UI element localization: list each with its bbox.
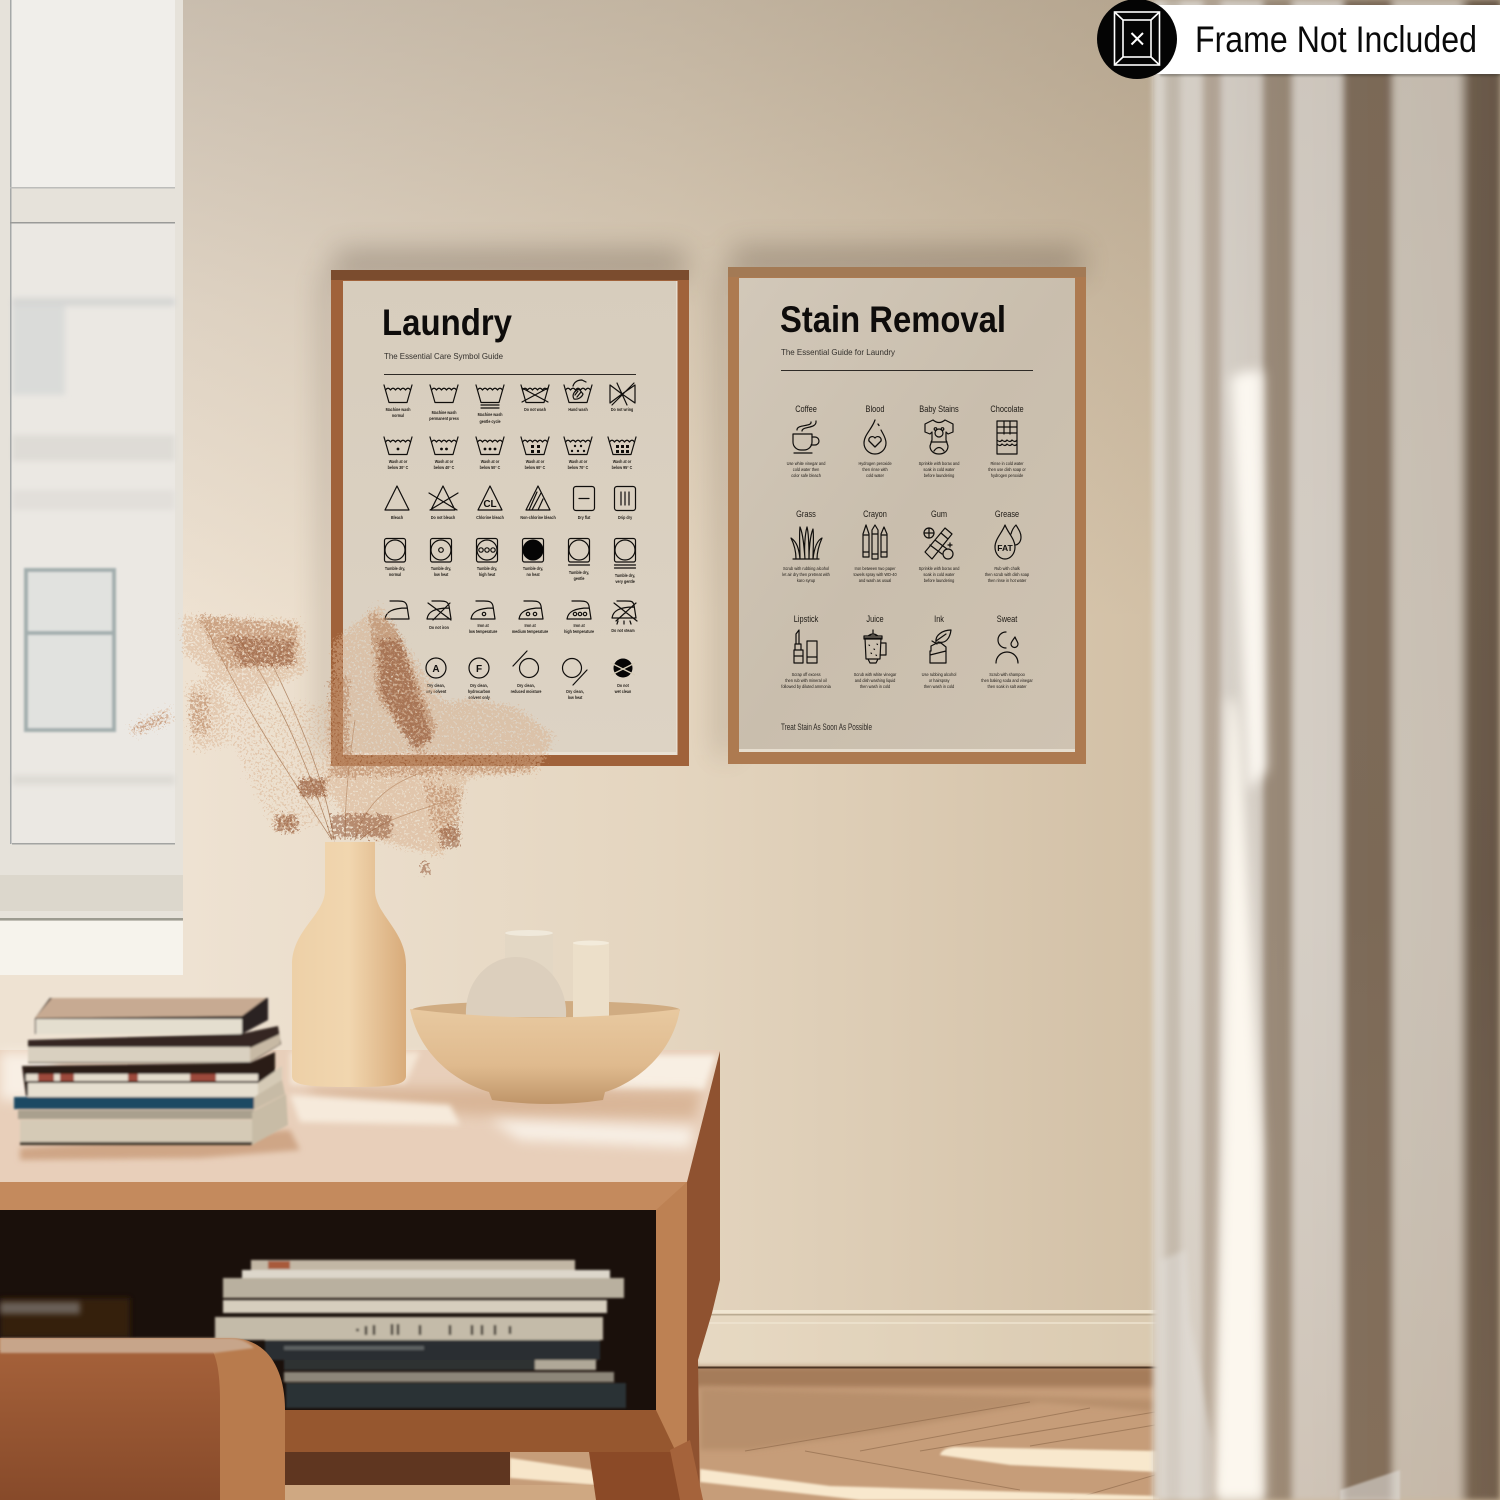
row: wash temperature symbols <box>384 437 636 470</box>
laundry title: Laundry <box>382 302 512 343</box>
icon: dry clean hydrocarbon: hydrocarbon <box>468 689 491 694</box>
icon: tumble dry low heat <box>430 538 452 577</box>
item: ink <box>922 614 956 689</box>
icon: fat drop: FAT <box>997 543 1014 553</box>
icon: dry clean low heat: Dry clean, <box>566 689 584 694</box>
icon: do not iron: Do not iron <box>429 625 449 630</box>
books on lower shelf <box>215 1260 626 1408</box>
item: blood <box>858 404 892 478</box>
item: blood: then rinse with <box>862 467 888 472</box>
item: chocolate <box>988 404 1026 478</box>
mid seed clusters <box>128 605 535 850</box>
icon: wash 40: Wash at or <box>435 459 454 464</box>
table side panel <box>687 1051 720 1500</box>
footer note: Treat Stain As Soon As Possible <box>781 722 872 732</box>
item: gum <box>919 509 960 583</box>
icon: iron high: high temperature <box>564 629 595 634</box>
icon: machine wash gentle cycle: gentle cycle <box>480 419 501 424</box>
item: sweat: then soak in salt water <box>988 684 1027 689</box>
icon: chocolate bar <box>997 421 1017 454</box>
item: ink: then wash in cold <box>924 684 955 689</box>
icon: dry clean low heat <box>562 658 587 700</box>
icon: iron medium: medium temperature <box>512 629 549 634</box>
item: chocolate: then use dish soap or <box>988 467 1026 472</box>
icon: dry clean reduced moisture: Dry clean, <box>517 683 535 688</box>
item: baby stains: soak in cold water <box>923 467 955 472</box>
item: crayon: towels spray with WD-40 <box>853 572 897 577</box>
row: tumble dry symbols <box>384 538 636 584</box>
icon: baby onesie <box>925 420 953 454</box>
icon: dry flat: Dry flat <box>578 515 591 520</box>
icon: lipstick <box>794 630 817 663</box>
icon: wash 95: Wash at or <box>613 459 632 464</box>
icon: juice mug <box>864 630 886 663</box>
table foot <box>589 1452 703 1500</box>
icon: wash 40: below 40° C <box>434 465 454 470</box>
bowl <box>410 1009 680 1104</box>
item: sweat: Sweat <box>997 614 1018 624</box>
icon: iron low <box>469 601 498 634</box>
icon: coffee cup <box>793 421 819 453</box>
badge bar <box>1150 5 1500 74</box>
icon: wash 70: below 70° C <box>568 465 588 470</box>
item: gum: Gum <box>931 509 947 519</box>
table leg frame <box>656 1182 687 1450</box>
icon: tumble dry normal: normal <box>389 572 401 577</box>
icon: tumble dry no heat: Tumble dry, <box>523 566 543 571</box>
item: sweat: then baking soda and vinegar <box>981 678 1033 683</box>
item: grease: then scrub with dish soap <box>985 572 1030 577</box>
icon: tumble dry low heat: Tumble dry, <box>431 566 451 571</box>
icon: iron medium: Iron at <box>524 623 536 628</box>
item: lipstick: followed by diluted ammonia <box>781 684 831 689</box>
item: crayon: Crayon <box>863 509 887 519</box>
icon: wash 95: below 95° C <box>612 465 632 470</box>
item: lipstick <box>781 614 831 689</box>
icon: machine wash permanent press: permanent press <box>429 416 459 421</box>
icon: chlorine bleach: CL <box>483 499 497 510</box>
light seed clusters <box>124 600 558 860</box>
item: grease <box>985 509 1030 583</box>
item: coffee: Coffee <box>795 404 817 414</box>
icon: machine wash normal: Machine wash <box>386 407 411 412</box>
icon: machine wash permanent press: Machine wash <box>432 410 457 415</box>
icon: person with sweat drop <box>996 632 1018 663</box>
icon: do not bleach: Do not bleach <box>431 515 456 520</box>
item: grass: let air dry then pretreat with <box>782 572 830 577</box>
opposite building window <box>26 570 114 730</box>
icon: do not wet clean: wet clean <box>614 689 632 694</box>
item: blood: Hydrogen peroxide <box>858 461 892 466</box>
icon: dry clean any solvent <box>426 658 447 694</box>
item: juice <box>854 614 897 689</box>
panel: Stain Removal poster <box>728 267 1086 764</box>
icon: dry clean any solvent: any solvent <box>426 689 447 694</box>
curtain <box>1153 0 1500 1500</box>
icon: dry clean hydrocarbon: Dry clean, <box>470 683 488 688</box>
icon: dry clean any solvent: A <box>432 664 440 675</box>
icon: tumble dry very gentle: Tumble dry, <box>615 573 635 578</box>
icon: wash 40 <box>430 437 458 470</box>
icon: tumble dry no heat <box>522 538 544 577</box>
item: chocolate: Chocolate <box>990 404 1024 414</box>
icon: wash 95 <box>608 437 636 470</box>
chair <box>0 1338 285 1500</box>
icon: dry clean hydrocarbon: F <box>476 664 482 675</box>
icon: gum <box>924 528 953 559</box>
icon: iron high: Iron at <box>573 623 585 628</box>
icon: tumble dry gentle: gentle <box>574 576 585 581</box>
item: grease: then rinse in hot water <box>988 578 1027 583</box>
stack of books on table <box>14 998 288 1145</box>
lower shelf board <box>285 1410 676 1452</box>
icon: tumble dry high heat: high heat <box>479 572 496 577</box>
stain frame <box>728 267 1086 764</box>
icon: drip dry: Drip dry <box>618 515 633 520</box>
item: coffee: color safe bleach <box>791 473 821 478</box>
item: crayon <box>853 509 897 583</box>
item: grass: Grass <box>796 509 816 519</box>
icon: iron low: Iron at <box>477 623 489 628</box>
panel: Laundry poster <box>331 270 689 766</box>
item: ink: Ink <box>934 614 945 624</box>
item: lipstick: Lipstick <box>794 614 819 624</box>
item: ink: Use rubbing alcohol <box>922 672 956 677</box>
item: coffee: cold water then <box>793 467 820 472</box>
icon: wash 60: Wash at or <box>526 459 545 464</box>
icon: do not wring <box>610 383 635 412</box>
item: baby stains: before laundering <box>924 473 955 478</box>
icon: wash 70: Wash at or <box>569 459 588 464</box>
icon: non-chlorine bleach <box>520 486 556 520</box>
row: bleach and dry symbols <box>385 486 636 520</box>
icon: do not wet clean <box>611 658 635 694</box>
icon: do not wash: Do not wash <box>524 407 546 412</box>
icon: tumble dry normal <box>384 538 406 577</box>
icon: machine wash normal: normal <box>392 413 404 418</box>
icon: iron medium <box>512 601 549 634</box>
stain title: Stain Removal <box>780 299 1006 340</box>
icon: do not wring: Do not wring <box>611 407 634 412</box>
dried flower plant <box>124 600 558 876</box>
item: gum: before laundering <box>924 578 955 583</box>
icon: wash 30: below 30° C <box>388 465 408 470</box>
item: juice: Scrub with white vinegar <box>854 672 897 677</box>
item: blood: Blood <box>866 404 884 414</box>
laundry frame <box>331 270 689 766</box>
icon: bleach: Bleach <box>391 515 403 520</box>
shelf interior <box>0 1205 660 1445</box>
icon: iron low: low temperature <box>469 629 498 634</box>
icon: non-chlorine bleach: Non-chlorine bleach <box>520 515 556 520</box>
item: coffee: Use white vinegar and <box>787 461 826 466</box>
row: dry clean symbols <box>426 651 635 700</box>
icon: do not steam: Do not steam <box>611 628 635 633</box>
icon: chlorine bleach <box>476 486 504 520</box>
icon: iron <box>385 601 409 619</box>
dark seed clusters <box>222 632 462 876</box>
icon: do not iron <box>427 601 451 630</box>
stain subtitle: The Essential Guide for Laundry <box>781 347 896 357</box>
item: chocolate: Rinse in cold water <box>990 461 1024 466</box>
bowl interior <box>412 1001 680 1019</box>
icon: do not steam <box>611 601 637 633</box>
icon: iron high <box>564 601 595 634</box>
item: juice: and dish washing liquid <box>855 678 896 683</box>
icon: ink and quill <box>930 630 951 663</box>
floor <box>285 1366 1160 1500</box>
icon: dry clean reduced moisture: reduced moisture <box>511 689 542 694</box>
baseboard <box>700 1310 1160 1367</box>
vase <box>292 842 406 1087</box>
icon: wash 50: below 50° C <box>480 465 500 470</box>
item: lipstick: then rub with mineral oil <box>785 678 827 683</box>
icon: wash 30 <box>384 437 412 470</box>
icon: dry flat <box>574 486 594 520</box>
item: ink: or hairspray <box>929 678 950 683</box>
icon: frame crossed <box>1114 12 1160 65</box>
icon: crayons <box>863 525 887 559</box>
badge: frame not included <box>1097 0 1500 79</box>
icon: tumble dry normal: Tumble dry, <box>385 566 405 571</box>
icon: wash 50 <box>476 437 504 470</box>
icon: do not bleach <box>429 486 458 520</box>
icon: wash 50: Wash at or <box>481 459 500 464</box>
icon: do not wash <box>521 385 549 412</box>
icon: dry clean reduced moisture <box>511 651 542 694</box>
icon: wash 60: below 60° C <box>525 465 545 470</box>
icon: tumble dry gentle <box>568 538 590 581</box>
icon: tumble dry high heat <box>476 538 498 577</box>
window <box>0 0 183 975</box>
icon: tumble dry very gentle <box>614 538 636 584</box>
frame poster shadows <box>322 247 1082 755</box>
item: gum: soak in cold water <box>923 572 955 577</box>
stain divider <box>781 370 1033 371</box>
item: crayon: Iron between two paper <box>855 566 896 571</box>
item: grass <box>782 509 830 583</box>
table top <box>0 1050 720 1500</box>
item: lipstick: Scrap off excess <box>792 672 821 677</box>
stems <box>205 625 450 840</box>
item: chocolate: hydrogen peroxide <box>991 473 1024 478</box>
icon: wash 30: Wash at or <box>389 459 408 464</box>
item: sweat: Scrub with shampoo <box>989 672 1025 677</box>
row: wash symbols <box>384 380 635 424</box>
icon: tumble dry no heat: no heat <box>527 572 540 577</box>
laundry subtitle: The Essential Care Symbol Guide <box>384 351 503 361</box>
icon: dry clean hydrocarbon <box>468 658 491 700</box>
decorative objects <box>466 930 609 1018</box>
icon: bleach <box>385 486 409 520</box>
icon: drip dry <box>614 486 636 520</box>
item: sweat <box>981 614 1033 689</box>
icon: tumble dry low heat: low heat <box>434 572 449 577</box>
item: blood: cold water <box>866 473 884 478</box>
icon: machine wash normal <box>384 385 412 418</box>
item: grass: Scrub with rubbing alcohol <box>783 566 829 571</box>
icon: tumble dry high heat: Tumble dry, <box>477 566 497 571</box>
icon: machine wash gentle cycle: Machine wash <box>478 412 503 417</box>
icon: dry clean any solvent: Dry clean, <box>427 683 445 688</box>
item: coffee <box>787 404 826 478</box>
icon: machine wash permanent press <box>429 385 459 421</box>
laundry divider <box>384 374 636 375</box>
item: grease: Rub with chalk <box>994 566 1021 571</box>
badge circle <box>1097 0 1177 79</box>
icon: wash 60 <box>521 437 549 470</box>
item: juice: then wash in cold <box>860 684 891 689</box>
item: crayon: and wash as usual <box>859 578 891 583</box>
icon: tumble dry gentle: Tumble dry, <box>569 570 589 575</box>
item: baby stains: Sprinkle with borax and <box>919 461 960 466</box>
icon: wash 70 <box>564 437 592 470</box>
item: baby stains: Baby Stains <box>919 404 959 414</box>
table front edge <box>0 1182 687 1210</box>
badge shadow <box>1160 73 1500 76</box>
icon: blood drop <box>864 420 886 454</box>
icon: do not wet clean: Do not <box>617 683 629 688</box>
icon: grass <box>791 527 822 559</box>
icon: machine wash gentle cycle <box>476 385 504 424</box>
icon: dry clean low heat: low heat <box>568 695 583 700</box>
icon: dry clean hydrocarbon: solvent only <box>468 695 490 700</box>
item: grass: karo syrup <box>797 578 816 583</box>
item: juice: Juice <box>866 614 884 624</box>
item: gum: Sprinkle with borax and <box>919 566 960 571</box>
icon: hand wash: Hand wash <box>568 407 588 412</box>
item: grease: Grease <box>995 509 1020 519</box>
item: baby stains <box>919 404 960 478</box>
icon: hand wash <box>564 380 592 412</box>
row: iron symbols <box>385 601 637 634</box>
icon: chlorine bleach: Chlorine bleach <box>476 515 504 520</box>
icon: tumble dry very gentle: very gentle <box>615 579 635 584</box>
